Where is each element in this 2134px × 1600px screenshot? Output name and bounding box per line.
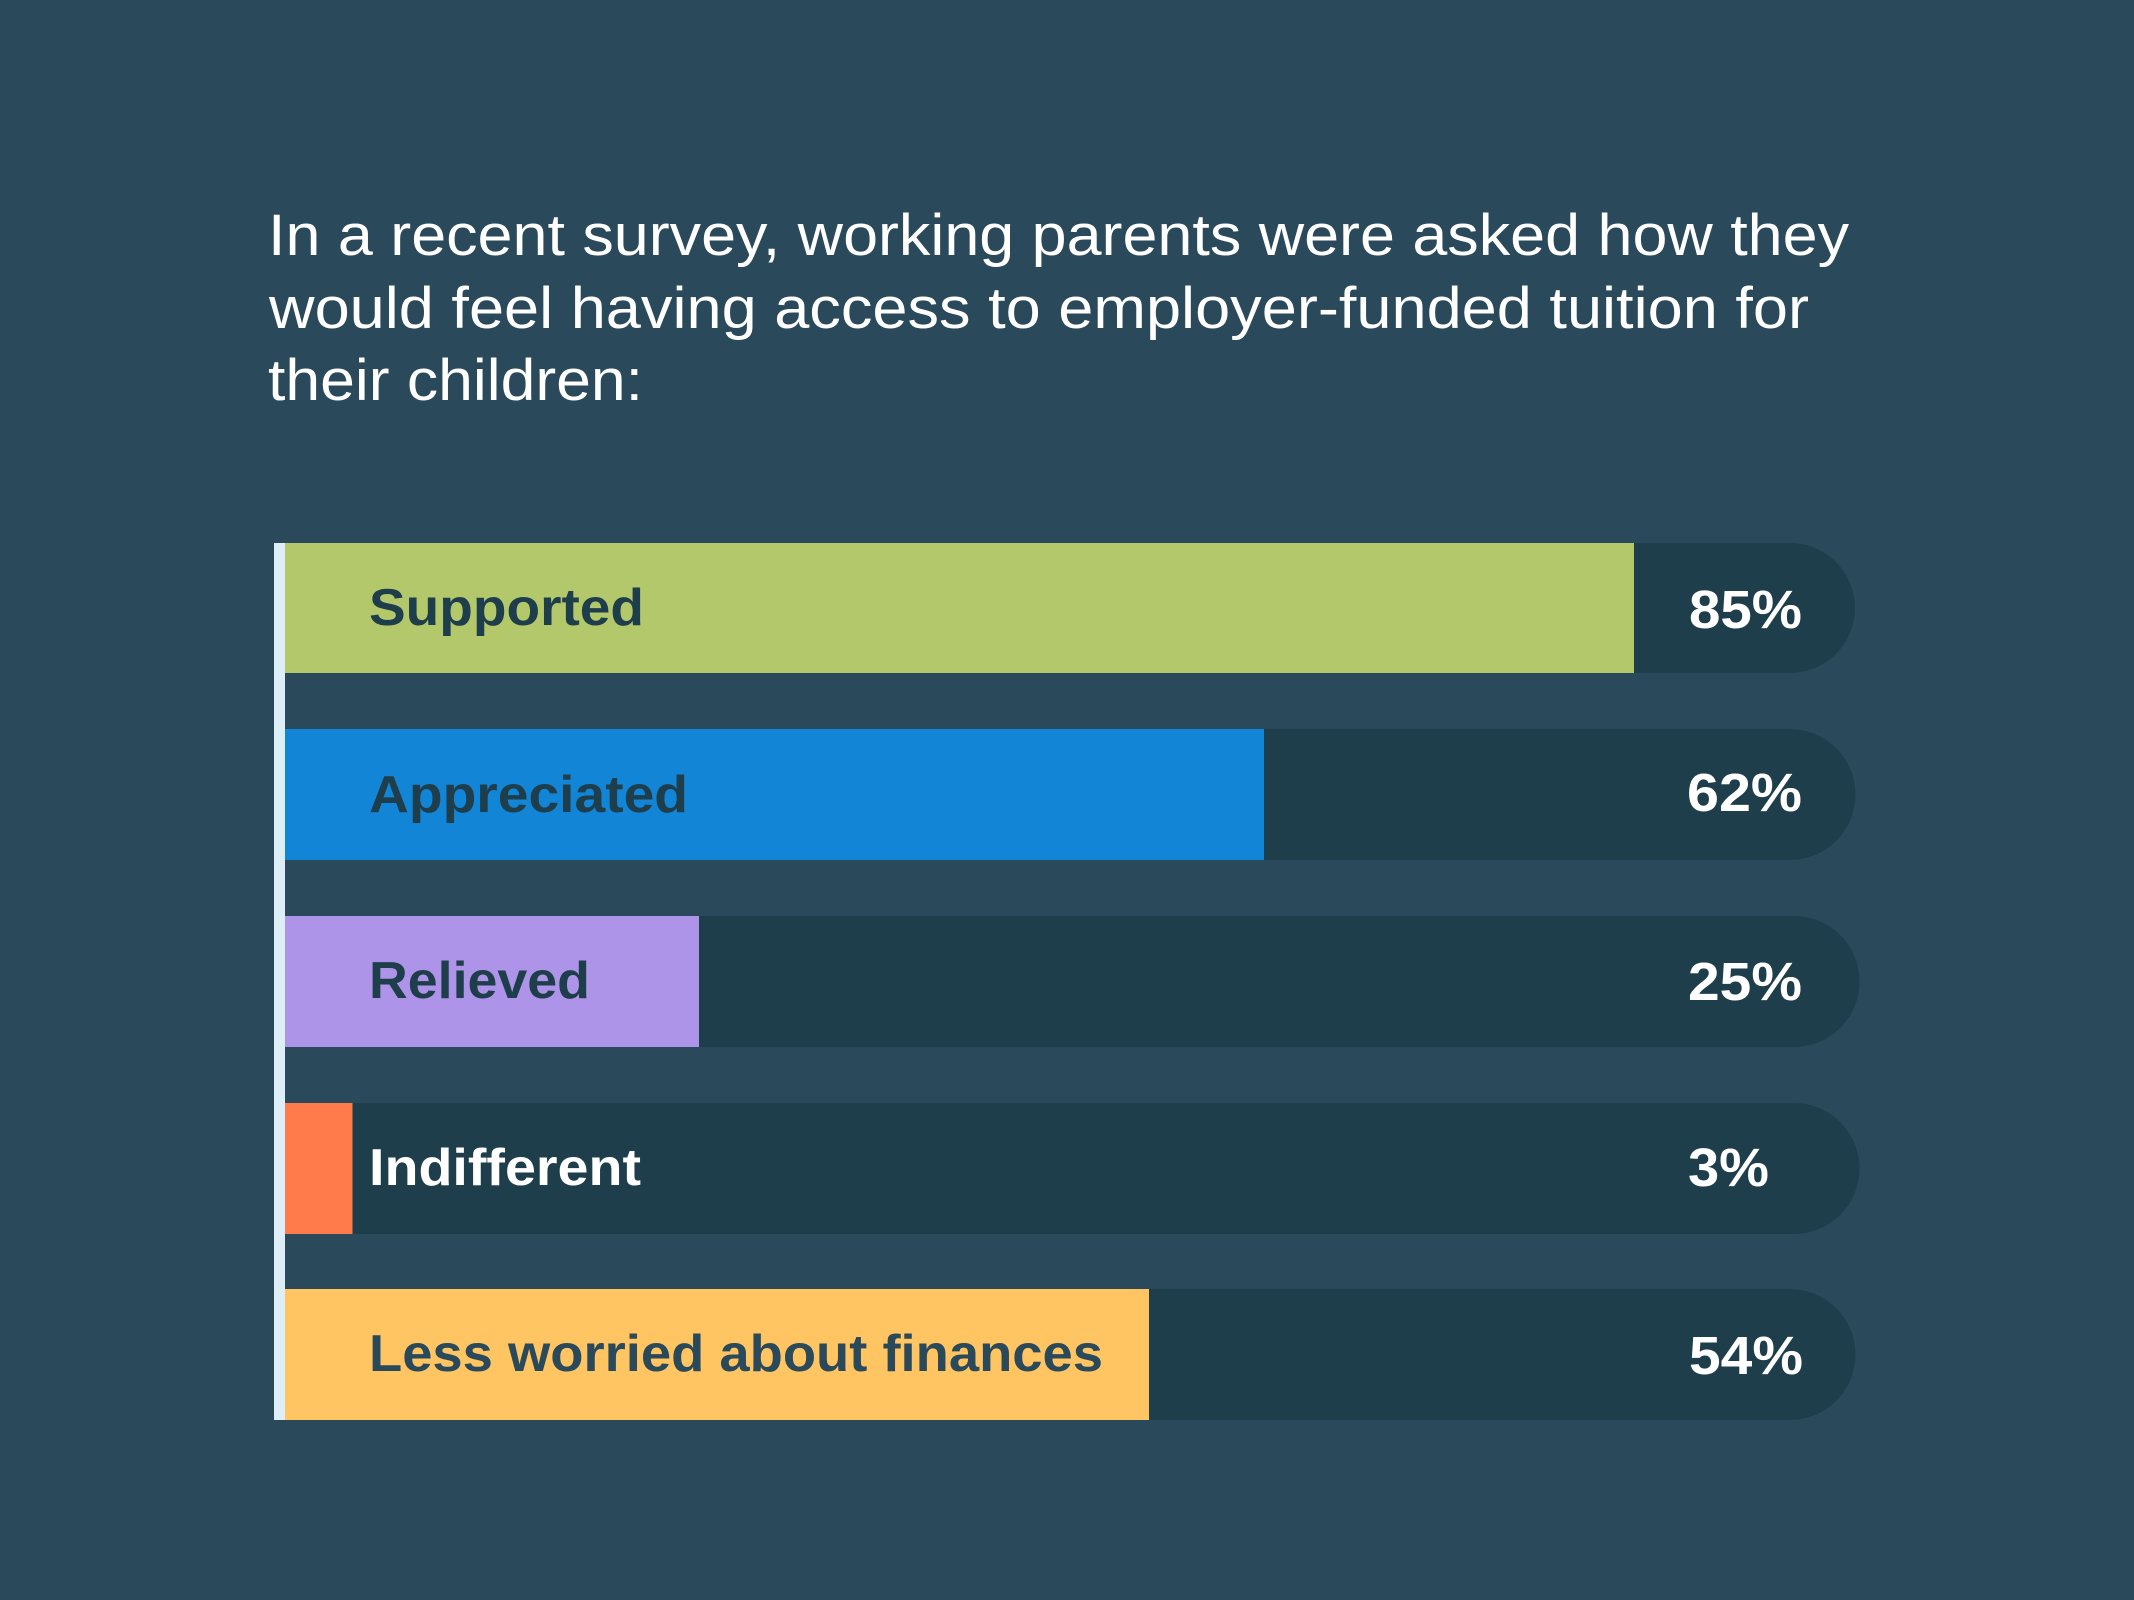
bar: Appreciated 62%: 62% bbox=[1687, 763, 1802, 823]
bar: Indifferent 3%: 3% bbox=[1688, 1138, 1769, 1198]
bar: Indifferent 3% bbox=[285, 1103, 1860, 1234]
bar: Supported 85% bbox=[285, 543, 1855, 673]
bar: Relieved 25%: Relieved bbox=[369, 952, 590, 1010]
title: would feel having access to employer-funded tuition for bbox=[268, 276, 1809, 341]
bar: Appreciated 62% bbox=[285, 729, 1856, 860]
bar: Supported 85%: 85% bbox=[1689, 580, 1802, 640]
bar: Less worried about finances 54% bbox=[285, 1289, 1856, 1420]
bar: Indifferent 3%: Indifferent bbox=[369, 1139, 641, 1197]
bar: Supported 85%: Supported bbox=[369, 579, 644, 637]
bar: Appreciated 62%: Appreciated bbox=[369, 766, 688, 824]
title bbox=[268, 203, 1849, 413]
title: In a recent survey, working parents were asked how they bbox=[268, 203, 1849, 268]
bar: Relieved 25% bbox=[285, 916, 1860, 1047]
bar chart bbox=[274, 543, 1860, 1420]
title: their children: bbox=[268, 348, 643, 413]
bar: Less worried about finances 54%: 54% bbox=[1689, 1326, 1803, 1386]
bar: Relieved 25%: 25% bbox=[1688, 952, 1802, 1012]
chart axis line bbox=[274, 543, 285, 1420]
bar: Less worried about finances 54%: Less worried about finances bbox=[369, 1325, 1103, 1383]
